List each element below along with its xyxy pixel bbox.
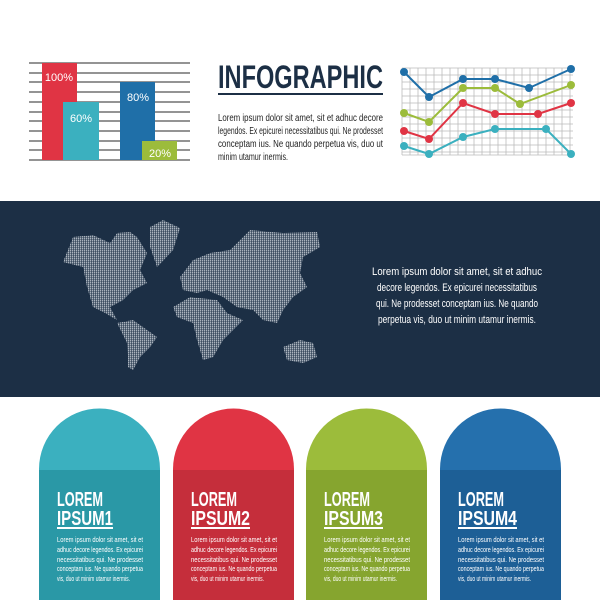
panel: card 3: vis, duo ut minim utamur inermis. — [324, 574, 397, 583]
panel: card 1: vis, duo ut minim utamur inermis. — [57, 574, 130, 583]
panel: card 4: necessitatibus qui. Ne prodesset — [458, 555, 545, 564]
panel: card 3 — [306, 408, 427, 600]
panel: card 4 — [440, 408, 561, 600]
panel: card 3: Lorem ipsum dolor sit amet, sit et — [324, 535, 411, 544]
panel: card 4: IPSUM4 — [458, 508, 518, 530]
bar chart: 20% — [149, 148, 171, 160]
panel: card 3: LOREM — [324, 489, 370, 511]
panel: dark map band — [0, 201, 600, 397]
text block: intro — [218, 113, 383, 163]
bar chart: 100% — [45, 72, 73, 84]
world map — [63, 220, 320, 370]
panel: card 2: IPSUM2 — [191, 508, 250, 530]
panel: card 2: LOREM — [191, 489, 237, 511]
text block: map description: decore legendos. Ex epicurei necessitatibus — [377, 282, 537, 294]
panel: card 3: conceptam ius. Ne quando perpetua — [324, 564, 411, 573]
panel: card 2: adhuc decore legendos. Ex epicurei — [191, 545, 277, 554]
panel: card 3: necessitatibus qui. Ne prodesset — [324, 555, 411, 564]
panel: card 1: adhuc decore legendos. Ex epicurei — [57, 545, 143, 554]
panel: card 4: conceptam ius. Ne quando perpetua — [458, 564, 545, 573]
panel: card 2: Lorem ipsum dolor sit amet, sit et — [191, 535, 278, 544]
panel: card 1: IPSUM1 — [57, 508, 113, 530]
panel: card 2: necessitatibus qui. Ne prodesset — [191, 555, 278, 564]
text block: intro: minim utamur inermis. — [218, 152, 288, 163]
panel: card 1: necessitatibus qui. Ne prodesset — [57, 555, 144, 564]
text block: map description: perpetua vis, duo ut minim utamur inermis. — [378, 314, 536, 326]
panel: card 3: adhuc decore legendos. Ex epicurei — [324, 545, 410, 554]
text block: map description: qui. Ne prodesset conceptam ius. Ne quando — [376, 298, 538, 310]
panel: card 1: conceptam ius. Ne quando perpetua — [57, 564, 144, 573]
panel: card 3: IPSUM3 — [324, 508, 383, 530]
text block: intro: Lorem ipsum dolor sit amet, sit et adhuc decore — [218, 113, 383, 124]
panel: card 4: Lorem ipsum dolor sit amet, sit et — [458, 535, 545, 544]
text block: intro: conceptam ius. Ne quando perpetua vis, duo ut — [218, 139, 383, 150]
panel: card 4: LOREM — [458, 489, 504, 511]
panel: card 2 — [173, 409, 294, 600]
panel: card 4: adhuc decore legendos. Ex epicurei — [458, 545, 544, 554]
panel: card 4: vis, duo ut minim utamur inermis. — [458, 574, 531, 583]
bar chart: 80% — [127, 92, 149, 104]
text block: map description: Lorem ipsum dolor sit amet, sit et adhuc — [372, 266, 542, 278]
text block: intro: legendos. Ex epicurei necessitatibus qui. Ne prodesset — [218, 126, 383, 137]
bar chart: 60% — [70, 113, 92, 125]
panel: card 2: vis, duo ut minim utamur inermis. — [191, 574, 264, 583]
panel: card 1 — [39, 408, 160, 600]
panel: card 2: conceptam ius. Ne quando perpetua — [191, 564, 278, 573]
line chart — [400, 65, 575, 158]
bar chart — [29, 63, 190, 160]
title: INFOGRAPHIC — [218, 59, 383, 95]
panel: card 1: LOREM — [57, 489, 103, 511]
panel: card 1: Lorem ipsum dolor sit amet, sit et — [57, 535, 144, 544]
text block: map description — [372, 266, 542, 326]
